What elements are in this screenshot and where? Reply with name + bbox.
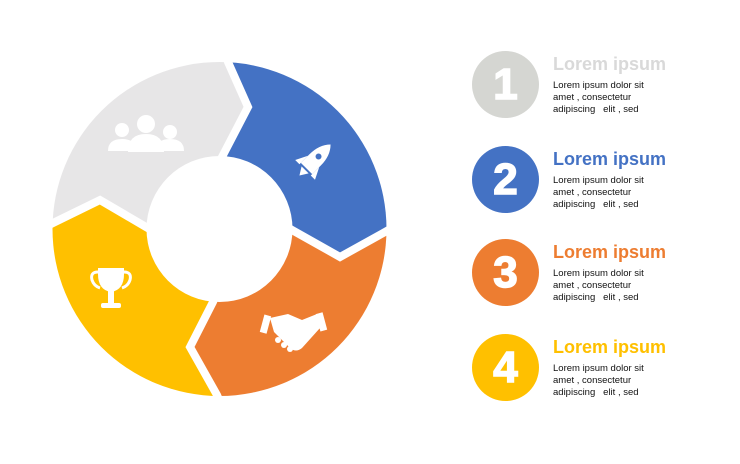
title 2: Lorem ipsum xyxy=(553,149,666,169)
segment: blue xyxy=(226,62,386,252)
icon: handshake xyxy=(260,312,327,352)
ring diagram xyxy=(52,62,386,396)
icon: trophy xyxy=(92,268,130,308)
badge 1: 1 xyxy=(493,60,518,109)
segment: gray xyxy=(53,62,244,222)
item 2 xyxy=(472,146,666,213)
icon: people xyxy=(108,115,184,152)
badge 1 xyxy=(472,51,539,118)
item 1 xyxy=(472,51,666,118)
icon: rocket xyxy=(290,135,340,185)
text 3: Lorem ipsum dolor sit amet , consectetur adipiscing elit , sed xyxy=(553,268,644,303)
title 4: Lorem ipsum xyxy=(553,337,666,357)
item 3 xyxy=(472,239,666,306)
text 4: Lorem ipsum dolor sit amet , consectetur adipiscing elit , sed xyxy=(553,363,644,398)
badge 4 xyxy=(472,334,539,401)
segment: yellow xyxy=(52,204,213,396)
title 3: Lorem ipsum xyxy=(553,242,666,262)
text 2: Lorem ipsum dolor sit amet , consectetur adipiscing elit , sed xyxy=(553,175,644,210)
badge 3: 3 xyxy=(493,248,518,297)
text 1: Lorem ipsum dolor sit amet , consectetur adipiscing elit , sed xyxy=(553,80,644,115)
segment: orange xyxy=(194,234,386,396)
badge 4: 4 xyxy=(493,343,518,392)
badge 3 xyxy=(472,239,539,306)
title 1: Lorem ipsum xyxy=(553,54,666,74)
badge 2 xyxy=(472,146,539,213)
item 4 xyxy=(472,334,666,401)
badge 2: 2 xyxy=(493,155,518,204)
